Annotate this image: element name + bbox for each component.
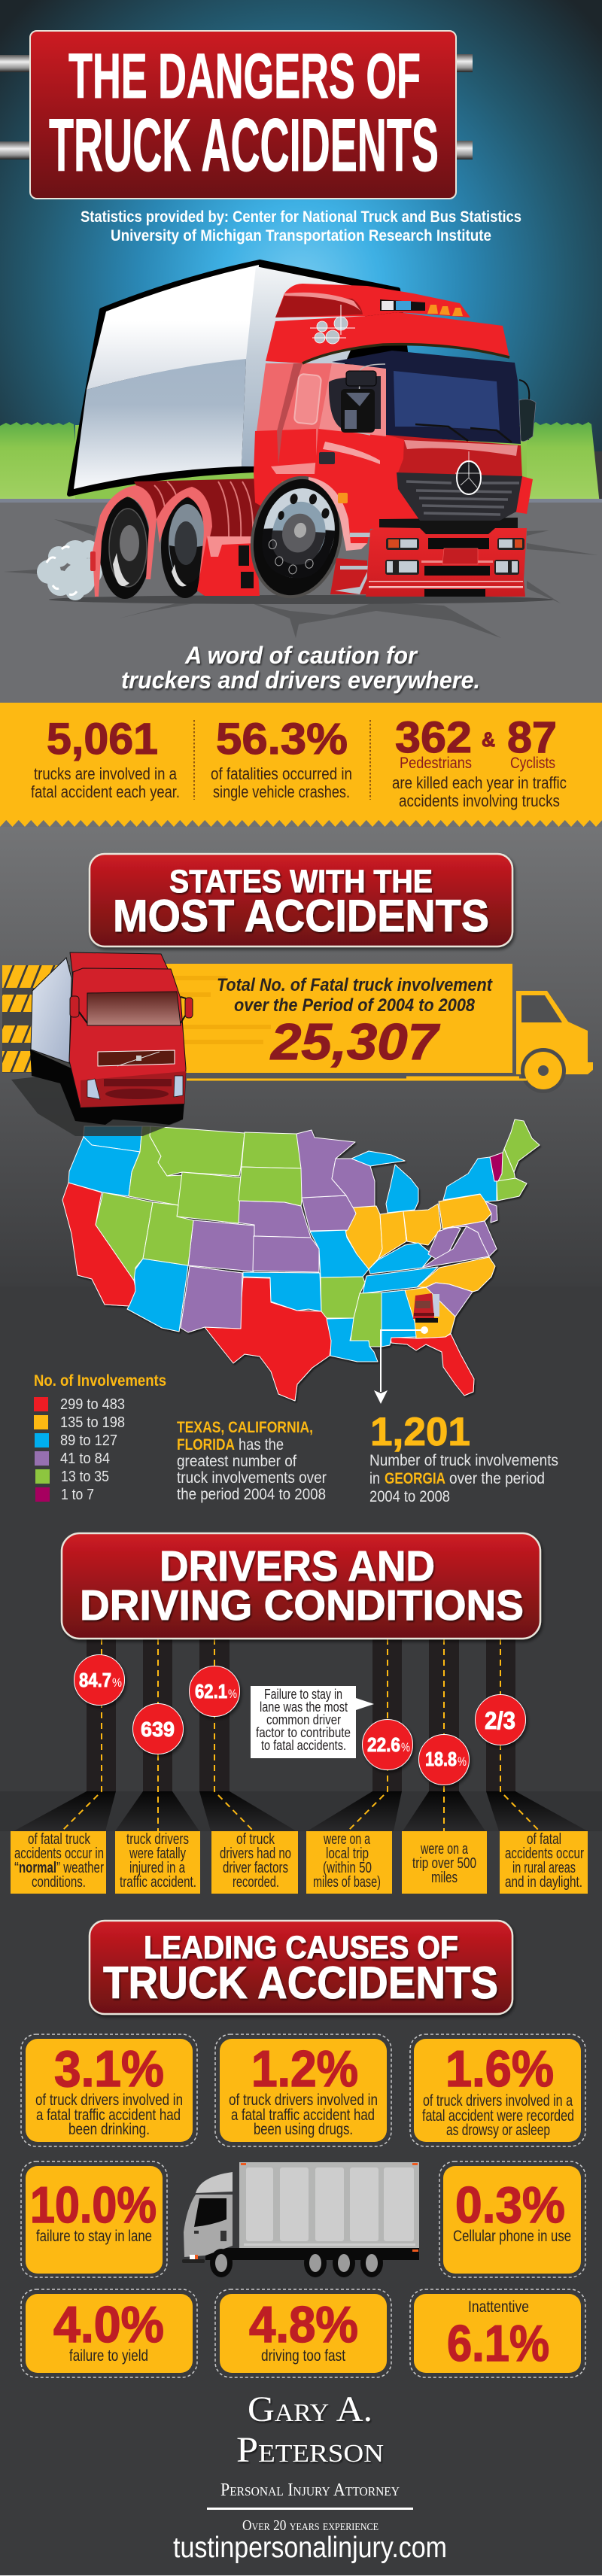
legend labels: 135 to 198 — [60, 1414, 125, 1431]
box: normal weather: conditions. — [32, 1874, 86, 1891]
box: rural areas: in rural areas — [512, 1860, 576, 1876]
Texas California Florida note: has the — [239, 1436, 284, 1454]
panel: yellow key statistics — [0, 703, 602, 827]
attorney name — [236, 2389, 384, 2470]
vertical road strips — [87, 1639, 515, 1791]
road sign title — [0, 31, 473, 199]
statistics source credit: Statistics provided by: Center for National Truck and Bus Statistics — [81, 208, 521, 226]
box body — [239, 2162, 419, 2248]
box: no driver factors — [211, 1831, 298, 1894]
card: drinking 3.1%: 3.1% — [54, 2040, 164, 2098]
skid line — [187, 1077, 527, 1080]
experience line: Over 20 years experience — [242, 2517, 379, 2534]
heading: drivers and driving conditions — [62, 1533, 540, 1639]
circle: 2/3: 2/3 — [485, 1707, 515, 1734]
truck total text: 25,307 — [269, 1013, 440, 1071]
map of US states — [62, 1119, 540, 1401]
Georgia stat: over the period — [449, 1470, 545, 1487]
circle: 22.6%: % — [401, 1740, 410, 1754]
legend swatches — [34, 1397, 50, 1502]
exhaust smoke — [37, 540, 102, 600]
roof spoiler — [275, 284, 470, 317]
yellow delivery truck graphic — [2, 964, 593, 1093]
card: drinking 3.1%: been drinking. — [68, 2121, 150, 2138]
cargo box — [69, 262, 421, 494]
driver fact boxes — [11, 1831, 588, 1894]
hubcaps — [215, 2254, 378, 2272]
yellow band — [0, 703, 602, 827]
card: yield 4.0% — [26, 2294, 193, 2373]
circle: 62.1% — [190, 1666, 239, 1717]
heading: states with the most accidents — [90, 854, 512, 946]
mirrors — [70, 996, 193, 1023]
heading: states with the most accidents: MOST ACCIDENTS — [113, 891, 489, 941]
card: inattentive 6.1%: 6.1% — [447, 2315, 549, 2372]
Georgia stat: GEORGIA — [385, 1470, 445, 1487]
circle: 62.1%: % — [228, 1687, 237, 1701]
card: drugs 1.2%: of truck drivers involved in — [229, 2091, 378, 2109]
Texas California Florida note: the period 2004 to 2008 — [177, 1486, 326, 1503]
box: no driver factors: drivers had no — [220, 1845, 291, 1862]
box: normal weather: normal — [19, 1860, 56, 1876]
Georgia stat: Number of truck involvements — [369, 1452, 558, 1469]
card: drugs 1.2%: a fatal traffic accident had — [231, 2107, 375, 2124]
truck box — [166, 964, 512, 1073]
card: drinking 3.1%: a fatal traffic accident had — [36, 2107, 181, 2124]
legend labels: 299 to 483 — [60, 1396, 125, 1413]
circle: 22.6%: 22.6 — [367, 1733, 400, 1756]
circle: 2/3 — [476, 1694, 525, 1745]
grey truck — [182, 2162, 419, 2277]
heading: leading causes of truck accidents: LEADING CAUSES OF — [144, 1930, 458, 1966]
grille — [397, 472, 522, 521]
stat: pedestrians and cyclists: Cyclists — [510, 755, 555, 772]
stat: 56.3% fatalities: single vehicle crashes. — [213, 782, 350, 801]
legend labels: 1 to 7 — [61, 1487, 94, 1503]
box: local trip: miles of base) — [313, 1874, 381, 1891]
wheel arch — [521, 1048, 566, 1093]
attorney name: Gary A. — [248, 2389, 372, 2429]
heading: leading causes of truck accidents — [90, 1921, 512, 2014]
circle: 18.8%: % — [458, 1754, 467, 1769]
front wheel arch — [309, 477, 367, 551]
stat: pedestrians and cyclists: 87 — [507, 713, 557, 762]
Texas California Florida note: truck involvements over — [177, 1469, 327, 1487]
georgia callout arrow — [374, 1326, 428, 1404]
card: drowsy 1.6%: 1.6% — [445, 2040, 554, 2098]
box: rural areas: of fatal — [527, 1831, 561, 1848]
wheel — [524, 1052, 562, 1089]
box: no driver factors: of truck — [236, 1831, 275, 1848]
zigzag edge — [0, 820, 602, 827]
states 135 to 198 — [345, 1194, 495, 1338]
grille — [98, 1050, 175, 1066]
circle: 639 — [132, 1703, 184, 1754]
roof visor — [266, 312, 509, 363]
truck roof fairing — [70, 952, 169, 978]
card: cellular 0.3% — [443, 2166, 581, 2274]
wipers — [415, 424, 512, 442]
card: lane 10.0%: 10.0% — [30, 2177, 157, 2234]
legend labels: 41 to 84 — [60, 1451, 110, 1467]
card: yield 4.0%: 4.0% — [53, 2296, 164, 2353]
website: tustinpersonalinjury.com — [173, 2532, 447, 2564]
attorney name: Peterson — [236, 2430, 384, 2470]
callout: failure to stay in lane: common driver — [266, 1712, 341, 1727]
red cartoon truck — [37, 262, 553, 605]
stat: pedestrians and cyclists: & — [482, 728, 495, 751]
states 41 to 84 — [181, 1130, 497, 1332]
box: local trip: were on a — [323, 1831, 371, 1848]
callout: failure to stay in lane — [251, 1686, 374, 1758]
box: over 500 miles: miles — [431, 1870, 458, 1886]
sign board — [30, 31, 456, 199]
card outlines — [21, 2034, 585, 2377]
heading: drivers and driving conditions: DRIVERS AND — [160, 1542, 435, 1590]
circle: 84.7%: 84.7 — [79, 1669, 111, 1691]
rear wheel 1 — [99, 497, 150, 599]
card: speed 4.8%: driving too fast — [261, 2347, 345, 2365]
card: drugs 1.2%: 1.2% — [251, 2040, 358, 2098]
cargo side — [31, 958, 71, 1063]
card: cellular 0.3%: 0.3% — [455, 2177, 565, 2234]
states 299 to 483 — [62, 1183, 474, 1401]
front wheel — [242, 469, 351, 605]
circle: 84.7%: % — [112, 1675, 122, 1690]
chassis — [205, 2248, 419, 2260]
stat: pedestrians and cyclists: 362 — [395, 713, 472, 762]
stat: 5,061 trucks: 5,061 — [47, 715, 158, 764]
card: lane 10.0% — [26, 2166, 163, 2274]
truck total text — [217, 975, 493, 1071]
attorney footer — [173, 2389, 447, 2564]
stat: 5,061 trucks: fatal accident each year. — [31, 782, 180, 801]
Georgia stat: 1,201 — [370, 1410, 470, 1454]
box: rural areas — [500, 1831, 588, 1894]
wheels — [210, 2249, 383, 2277]
truck total text: Total No. of Fatal truck involvement — [217, 975, 493, 995]
circle: 18.8%: 18.8 — [425, 1748, 457, 1770]
box: fatally injured: injured in a — [129, 1860, 186, 1876]
card: drinking 3.1% — [26, 2039, 193, 2142]
box: local trip: (within 50 — [323, 1860, 372, 1876]
stat: 5,061 trucks: trucks are involved in a — [34, 764, 178, 783]
card: speed 4.8% — [220, 2294, 387, 2373]
black under grille — [379, 518, 518, 536]
tagline — [121, 642, 480, 694]
roof deflector — [196, 2172, 233, 2193]
states 89 to 127 — [68, 1126, 497, 1362]
card: drugs 1.2%: been using drugs. — [254, 2121, 353, 2138]
stat: pedestrians and cyclists: Pedestrians — [400, 755, 472, 772]
side mirrors — [341, 364, 536, 442]
road funnels — [14, 1791, 588, 1831]
box: normal weather: ” weather — [56, 1860, 104, 1876]
attorney title: Personal Injury Attorney — [220, 2480, 400, 2500]
card: cellular 0.3%: Cellular phone in use — [453, 2228, 571, 2245]
stat: pedestrians and cyclists: are killed each year in traffic — [392, 773, 567, 792]
card: drowsy 1.6% — [414, 2039, 581, 2142]
Georgia stat: in — [369, 1470, 380, 1487]
side step box — [197, 536, 260, 596]
heading: states with the most accidents: STATES WITH THE — [169, 864, 433, 900]
cab steps — [330, 533, 371, 594]
legend — [34, 1372, 166, 1503]
box: over 500 miles: trip over 500 — [412, 1855, 476, 1872]
rear fender ribs — [134, 472, 265, 539]
circle: 639: 639 — [141, 1718, 175, 1741]
emblem — [455, 451, 482, 494]
mini truck on Georgia — [413, 1293, 439, 1323]
cab side — [254, 363, 332, 474]
Texas California Florida note — [177, 1419, 327, 1503]
Georgia stat — [369, 1410, 558, 1505]
Georgia stat: 2004 to 2008 — [369, 1488, 450, 1505]
heading: drivers and driving conditions: DRIVING CONDITIONS — [80, 1581, 524, 1630]
circle: 62.1%: 62.1 — [195, 1680, 227, 1703]
stat dividers — [194, 720, 370, 800]
rear wheel 2 — [161, 497, 209, 598]
callout: failure to stay in lane: factor to contribute — [256, 1725, 351, 1740]
card: inattentive 6.1% — [414, 2294, 581, 2373]
tagline: truckers and drivers everywhere. — [121, 667, 480, 694]
shadow under truck — [49, 595, 553, 604]
box: fatally injured: traffic accident. — [120, 1874, 196, 1891]
faint track marks — [173, 978, 271, 1042]
box: fatally injured: truck drivers — [126, 1831, 189, 1848]
stat: 56.3% fatalities — [211, 715, 352, 801]
chrome roof lamps — [310, 305, 355, 344]
card: inattentive 6.1%: Inattentive — [468, 2298, 529, 2316]
cab window — [521, 995, 562, 1022]
box: no driver factors: recorded. — [233, 1874, 279, 1891]
box: over 500 miles — [402, 1831, 487, 1894]
road skid burst shadow — [4, 519, 598, 638]
chassis wheels — [30, 1050, 184, 1125]
legend labels: 89 to 127 — [60, 1432, 117, 1449]
windshield frame — [332, 351, 521, 444]
legend title: No. of Involvements — [34, 1372, 166, 1390]
stat: 5,061 trucks — [31, 715, 180, 801]
divider rule — [207, 2508, 413, 2510]
cab body — [69, 968, 186, 1107]
hero scene background — [0, 0, 602, 703]
circle: 18.8% — [418, 1735, 470, 1785]
heading: leading causes of truck accidents: TRUCK ACCIDENTS — [103, 1958, 498, 2008]
cab door — [315, 363, 386, 474]
box panels — [244, 2167, 415, 2246]
cab front panel — [386, 435, 533, 514]
legend labels — [60, 1396, 125, 1503]
circle: 22.6% — [363, 1720, 412, 1769]
road lanes — [14, 1639, 588, 1831]
states 1 to 7 — [490, 1153, 503, 1181]
legend labels: 13 to 35 — [61, 1469, 109, 1485]
stat circles — [74, 1655, 525, 1785]
box markers — [241, 2163, 418, 2252]
statistics source credit — [81, 208, 521, 245]
front bumper — [366, 527, 527, 597]
stat: pedestrians and cyclists — [392, 713, 567, 810]
statistics source credit: University of Michigan Transportation Research Institute — [111, 227, 491, 245]
box: fatally injured: were fatally — [129, 1845, 186, 1862]
truck cab silhouette — [516, 991, 593, 1074]
card: drinking 3.1%: of truck drivers involved in — [35, 2091, 183, 2109]
box: local trip: local trip — [326, 1845, 369, 1862]
tagline: A word of caution for — [184, 642, 418, 669]
states 13 to 35 — [96, 1119, 540, 1347]
cab body — [184, 2195, 233, 2257]
callout: failure to stay in lane: lane was the most — [260, 1700, 348, 1715]
box: fatally injured — [115, 1831, 200, 1894]
stat: pedestrians and cyclists: accidents involving trucks — [399, 791, 560, 810]
windshield — [87, 992, 181, 1025]
circle: 84.7% — [74, 1655, 125, 1705]
truck total text: over the Period of 2004 to 2008 — [234, 995, 476, 1016]
box: over 500 miles: were on a — [420, 1841, 469, 1858]
cab details — [182, 2231, 227, 2263]
box: normal weather: “ — [14, 1860, 19, 1876]
sign poles — [0, 54, 473, 159]
callout: failure to stay in lane: Failure to stay in — [264, 1687, 342, 1702]
box: local trip — [306, 1831, 392, 1894]
red truck front illustration — [11, 952, 193, 1136]
box: normal weather — [11, 1831, 106, 1894]
visor trim line — [303, 345, 509, 363]
card: speed 4.8%: 4.8% — [249, 2296, 358, 2353]
card: drowsy 1.6%: as drowsy or asleep — [446, 2122, 550, 2139]
box: normal weather: of fatal truck — [28, 1831, 91, 1848]
Texas California Florida note: FLORIDA — [177, 1436, 235, 1454]
Texas California Florida note: TEXAS, CALIFORNIA, — [177, 1419, 313, 1436]
cab lower body — [254, 472, 423, 544]
cab window — [194, 2198, 227, 2227]
lane dashes — [62, 1639, 540, 1831]
Texas California Florida note: greatest number of — [177, 1453, 296, 1470]
card: yield 4.0%: failure to yield — [69, 2347, 148, 2365]
card: lane 10.0%: failure to stay in lane — [36, 2228, 152, 2245]
rear fenders — [90, 485, 212, 597]
card: drugs 1.2% — [220, 2039, 387, 2142]
windshield glass — [394, 371, 500, 430]
stat: 56.3% fatalities: 56.3% — [216, 715, 348, 764]
stat: 56.3% fatalities: of fatalities occurred in — [211, 764, 352, 783]
callout: failure to stay in lane: to fatal accidents. — [261, 1738, 346, 1753]
bumper details — [81, 1071, 186, 1107]
lower band behind funnels — [0, 1791, 602, 1831]
box: normal weather: accidents occur in — [14, 1845, 104, 1862]
box: no driver factors: driver factors — [223, 1860, 288, 1876]
tire tracks — [2, 965, 70, 1073]
truck ground shadow — [11, 1076, 181, 1136]
